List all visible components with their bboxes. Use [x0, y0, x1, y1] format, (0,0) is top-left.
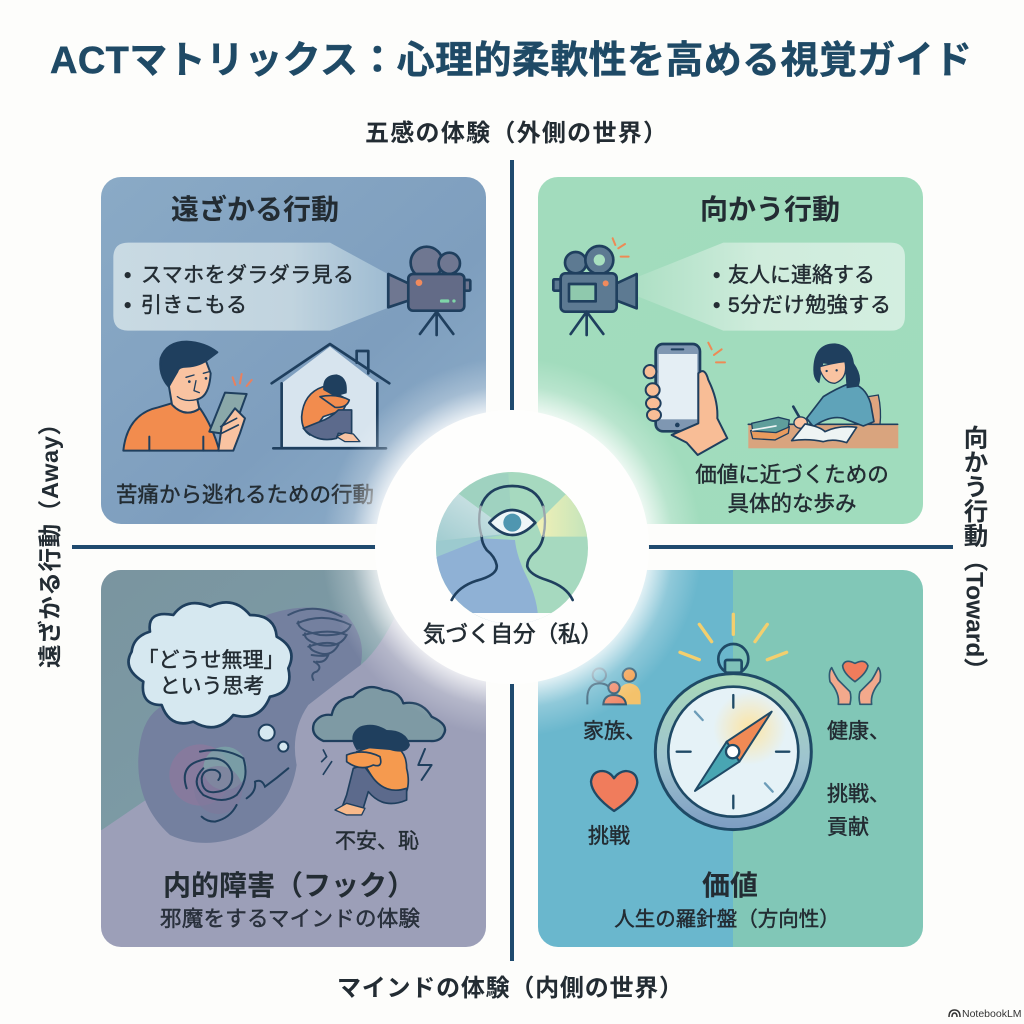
camera beam bubble: away list: •	[124, 294, 131, 317]
camera beam bubble: toward list: •	[713, 294, 720, 317]
panel subheading: values: 人生の羅針盤（方向性）	[614, 908, 840, 931]
camera beam bubble: away list: •	[124, 264, 131, 287]
NotebookLM badge: NotebookLM	[962, 1008, 1022, 1020]
axis label: right: 向かう行動（Toward）	[960, 425, 988, 682]
center label: 気づく自分（私）	[423, 622, 603, 647]
panel heading: values: 価値	[702, 870, 758, 901]
camera beam bubble: away list: スマホをダラダラ見る	[141, 264, 354, 287]
panel: toward moves	[538, 177, 923, 524]
dark mind blob	[138, 607, 362, 843]
icon: compass	[655, 614, 811, 830]
icon: whirlwind	[288, 609, 351, 680]
label: challenge and contribution: 挑戦、	[827, 783, 890, 806]
thought cloud: 「どうせ無理」	[138, 649, 284, 672]
white fade around the center	[101, 342, 923, 752]
icon: film camera, toward	[553, 238, 637, 335]
illustration: person under storm cloud	[313, 687, 445, 815]
camera beam bubble: toward list: •	[713, 264, 720, 287]
teal background area	[101, 570, 393, 830]
icon: hands holding heart	[829, 661, 881, 704]
title: ACTマトリックス：心理的柔軟性を高める視覚ガイド	[50, 40, 972, 82]
thought cloud	[129, 602, 291, 727]
axis: horizontal, left	[72, 545, 376, 549]
panel subheading: inner obstacles: 邪魔をするマインドの体験	[160, 907, 420, 931]
axis: vertical, lower	[510, 683, 514, 961]
thought cloud: という思考	[160, 675, 264, 698]
thought bubbles	[259, 725, 288, 752]
icon: family	[587, 668, 641, 704]
illustration: student studying at desk	[748, 343, 898, 448]
panel caption: toward	[695, 463, 889, 516]
awareness disk	[436, 472, 588, 624]
axis label: left: 遠ざかる行動（Away）	[36, 412, 63, 668]
label: feelings: 不安、恥	[335, 830, 419, 853]
illustration: person hiding in a house	[272, 344, 389, 448]
label: challenge and contribution: 貢献	[827, 816, 869, 839]
illustration: hand holding phone	[644, 343, 727, 455]
illustration: man looking at phone	[123, 342, 252, 451]
icon: film camera, away	[388, 247, 470, 335]
panel heading: toward: 向かう行動	[700, 194, 840, 225]
icon: heart	[591, 771, 637, 811]
label: challenge: 挑戦	[588, 825, 630, 848]
camera beam bubble: away list: 引きこもる	[141, 294, 247, 317]
center: noticing self	[375, 410, 649, 684]
label: health: 健康、	[827, 720, 890, 743]
person outline and eye	[452, 486, 573, 600]
panel caption: toward: 価値に近づくための	[695, 463, 889, 487]
axis: vertical, upper	[510, 160, 514, 412]
camera beam bubble: away list	[113, 243, 387, 331]
camera beam bubble: toward list	[638, 243, 905, 331]
label: family: 家族、	[583, 720, 646, 743]
panel caption: toward: 具体的な歩み	[727, 492, 857, 516]
panel heading: inner obstacles: 内的障害（フック）	[163, 870, 415, 901]
label: challenge and contribution	[827, 783, 890, 839]
panel: inner obstacles	[90, 565, 486, 947]
camera beam bubble: toward list: 5分だけ勉強する	[728, 294, 891, 317]
axis: horizontal, right	[648, 545, 953, 549]
panel: away moves	[101, 177, 486, 524]
panel heading: away: 遠ざかる行動	[171, 193, 339, 225]
panel: values	[538, 570, 923, 947]
axis label: top: 五感の体験（外側の世界）	[365, 120, 667, 147]
icon: tangled thoughts	[169, 744, 288, 822]
axis label: bottom: マインドの体験（内側の世界）	[337, 975, 683, 1002]
camera beam bubble: toward list: 友人に連絡する	[728, 264, 875, 287]
panel caption: away: 苦痛から逃れるための行動	[116, 483, 374, 507]
